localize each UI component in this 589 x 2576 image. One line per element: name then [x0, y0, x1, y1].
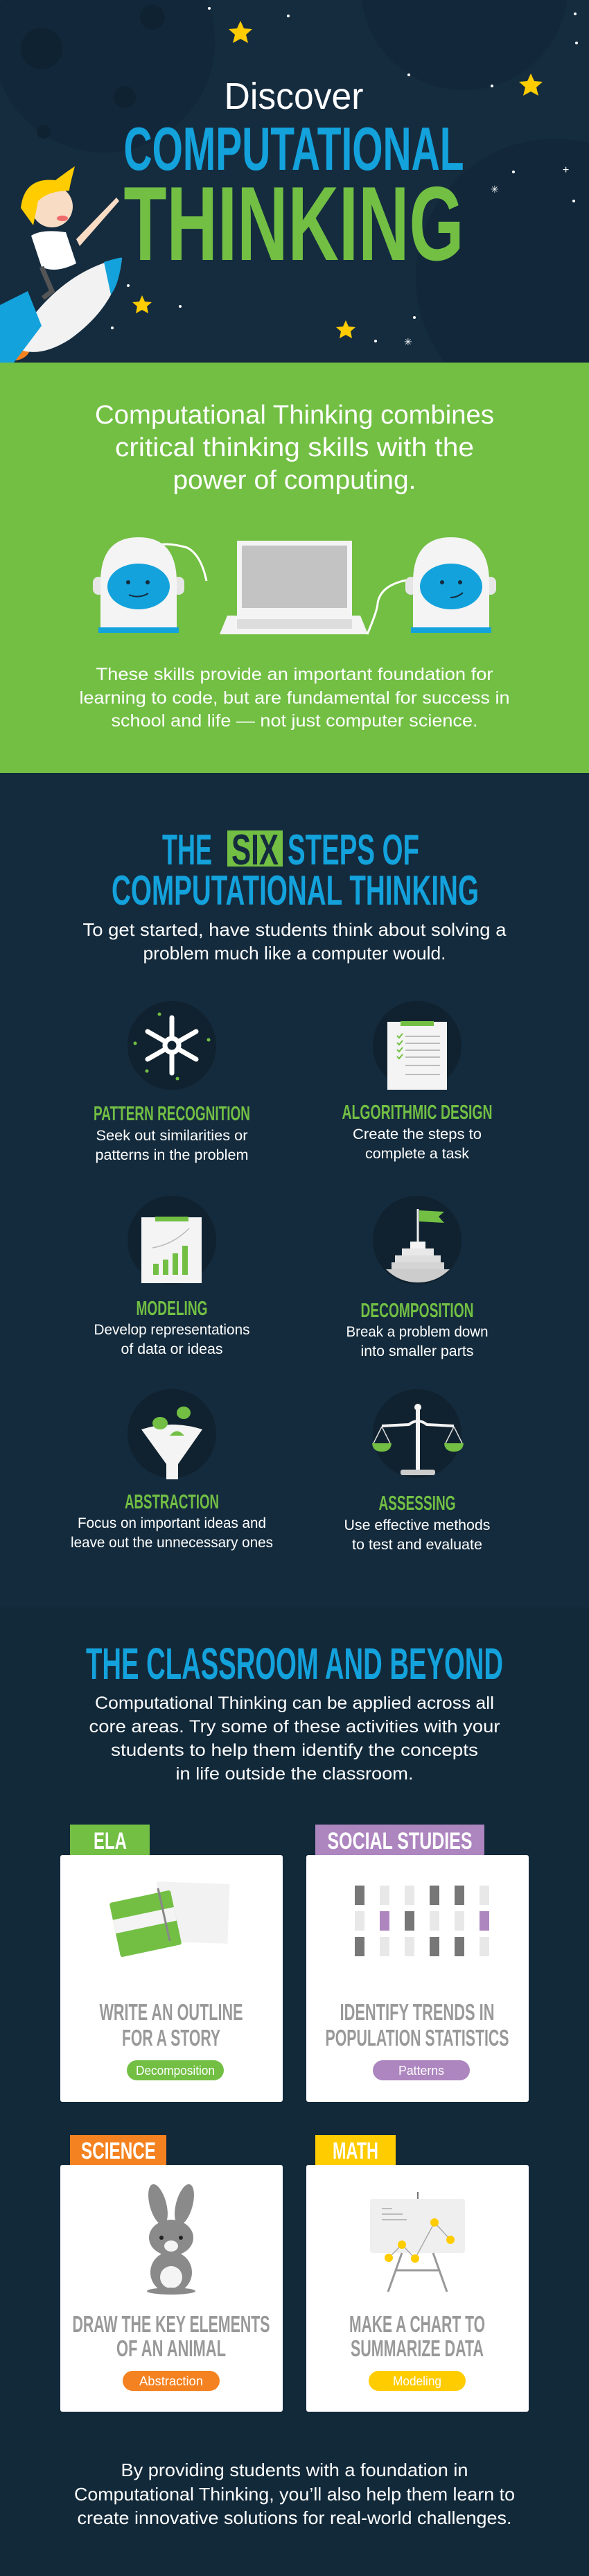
step: decomposition: into smaller parts [360, 1343, 474, 1359]
icon: right robot [367, 537, 496, 634]
heading: six steps: SIX [231, 826, 279, 874]
step: abstraction: Focus on important ideas and [78, 1515, 266, 1531]
step: decomposition [346, 1196, 488, 1359]
heading: six steps [112, 826, 479, 914]
panel: intro green [0, 363, 589, 773]
step: decomposition: Break a problem down [346, 1324, 488, 1340]
card: ELA: ELA [94, 1828, 127, 1854]
step: algorithmic design: complete a task [365, 1146, 470, 1162]
step: abstraction [71, 1389, 273, 1551]
card: ELA [60, 1825, 283, 2102]
step: algorithmic design: Create the steps to [353, 1126, 482, 1142]
card: math: Modeling [393, 2374, 441, 2388]
footer text: Computational Thinking, you’ll also help them learn to [74, 2484, 515, 2505]
card: ELA: WRITE AN OUTLINE [100, 1999, 243, 2025]
classroom intro text: students to help them identify the concepts [111, 1741, 478, 1760]
step: abstraction: leave out the unnecessary ones [71, 1535, 273, 1551]
card: ELA: FOR A STORY [122, 2025, 220, 2051]
icon: snowflake [148, 1018, 196, 1073]
card: math: MATH [333, 2138, 378, 2164]
intro heading text: power of computing. [173, 466, 416, 495]
icon: population grid [355, 1886, 489, 1956]
icon: laptop [220, 541, 368, 634]
title [123, 76, 464, 283]
step: pattern recognition: PATTERN RECOGNITION [94, 1103, 250, 1125]
icon: chart easel [370, 2192, 465, 2292]
icon: chart clipboard [141, 1217, 202, 1283]
icon: notebook [109, 1881, 229, 1957]
card: social studies [306, 1825, 529, 2102]
stars [132, 21, 543, 338]
step: pattern recognition [94, 1001, 250, 1163]
classroom intro text: in life outside the classroom. [176, 1764, 413, 1784]
step: assessing: ASSESSING [378, 1492, 456, 1515]
card: math [306, 2135, 529, 2412]
card: math: SUMMARIZE DATA [351, 2335, 484, 2361]
step: assessing [344, 1389, 491, 1553]
intro body text [79, 665, 510, 731]
card: ELA: Decomposition [136, 2064, 215, 2078]
classroom intro text [89, 1694, 500, 1784]
classroom intro text: core areas. Try some of these activities with your [89, 1717, 500, 1737]
card: math: MAKE A CHART TO [349, 2311, 485, 2337]
step: modeling: of data or ideas [121, 1341, 223, 1357]
intro body text: school and life — not just computer science. [111, 711, 478, 731]
step: pattern recognition: patterns in the problem [96, 1147, 248, 1163]
icon: funnel [141, 1407, 202, 1479]
step: modeling [94, 1196, 249, 1357]
header background: + [563, 164, 569, 176]
footer text: create innovative solutions for real-world challenges. [78, 2507, 511, 2528]
card: science [60, 2135, 283, 2412]
illustration: kid on rocket [0, 166, 122, 363]
footer text [74, 2460, 515, 2528]
six steps subtitle [83, 919, 507, 964]
icon: scale [372, 1404, 464, 1475]
step: assessing: to test and evaluate [352, 1537, 482, 1553]
header background: ✳ [491, 184, 499, 195]
intro heading text: Computational Thinking combines [95, 401, 494, 430]
six steps subtitle: problem much like a computer would. [143, 943, 446, 964]
step: algorithmic design: ALGORITHMIC DESIGN [342, 1102, 492, 1124]
step: assessing: Use effective methods [344, 1517, 491, 1533]
intro heading text [95, 401, 494, 495]
card: science: DRAW THE KEY ELEMENTS [72, 2311, 270, 2337]
card: social studies: SOCIAL STUDIES [327, 1828, 473, 1854]
intro body text: These skills provide an important foundation for [96, 665, 493, 684]
icon: left robot [93, 537, 206, 633]
footer text: By providing students with a foundation in [121, 2460, 468, 2480]
heading: six steps: STEPS OF [288, 826, 419, 874]
six steps subtitle: To get started, have students think about solving a [83, 919, 507, 940]
classroom intro text: Computational Thinking can be applied across all [95, 1694, 494, 1713]
step: abstraction: ABSTRACTION [125, 1491, 219, 1513]
section background: classroom [0, 1607, 589, 2576]
step: modeling: Develop representations [94, 1322, 249, 1338]
card: science: OF AN ANIMAL [116, 2335, 226, 2361]
icon: checklist clipboard [387, 1021, 447, 1090]
intro heading text: critical thinking skills with the [115, 433, 474, 462]
card: social studies: IDENTIFY TRENDS IN [340, 1999, 495, 2025]
card: social studies: Patterns [398, 2064, 444, 2078]
intro body text: learning to code, but are fundamental for success in [79, 688, 510, 708]
title: Discover [225, 76, 364, 117]
heading: six steps: THE [162, 826, 212, 874]
header background [0, 0, 589, 416]
header background: ✳ [404, 336, 412, 347]
icon: flag on steps [386, 1209, 450, 1282]
step: algorithmic design [342, 1001, 492, 1162]
card: science: Abstraction [139, 2374, 203, 2388]
step: decomposition: DECOMPOSITION [360, 1300, 474, 1322]
icon: rabbit [145, 2182, 197, 2295]
step: pattern recognition: Seek out similarities or [96, 1128, 248, 1144]
step: modeling: MODELING [136, 1298, 208, 1320]
card: science: SCIENCE [81, 2138, 156, 2164]
